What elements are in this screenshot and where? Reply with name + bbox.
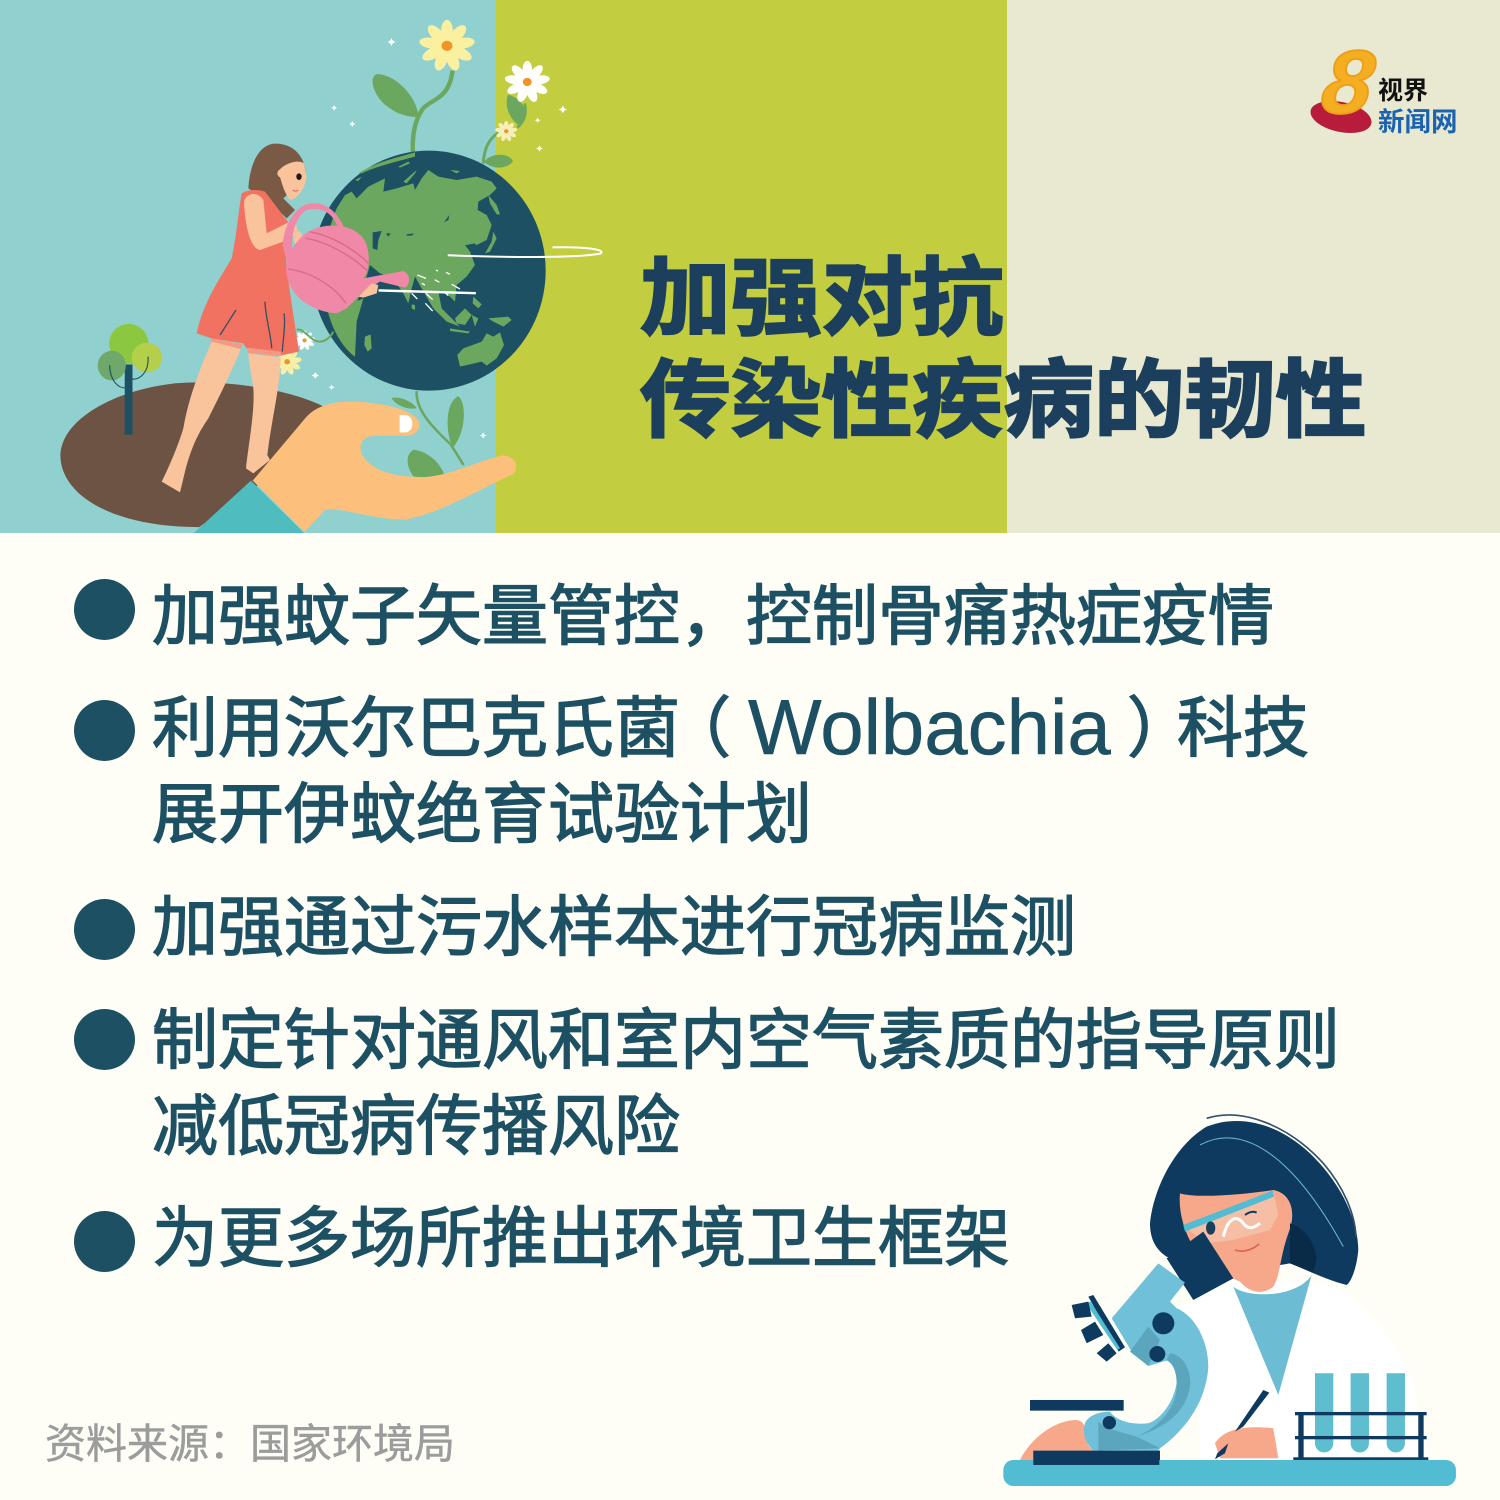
- legs: [162, 342, 281, 492]
- ground island: [60, 382, 327, 527]
- illustration: girl watering the globe: [60, 20, 603, 533]
- flower stem: [297, 330, 333, 342]
- water drops: [412, 270, 460, 311]
- bullet 4: [74, 1009, 135, 1070]
- lab coat: [1180, 1277, 1428, 1460]
- header panel background: [0, 0, 1500, 533]
- logo text: 新闻网: [1378, 107, 1458, 137]
- goggles: [1183, 1191, 1278, 1243]
- microscope: [1020, 1263, 1208, 1465]
- shirt: [1233, 1275, 1312, 1395]
- test tubes: [1315, 1373, 1405, 1452]
- text: item 4: 减低冠病传播风险: [152, 1089, 680, 1163]
- text: item 4: 制定针对通风和室内空气素质的指导原则: [152, 1003, 1340, 1077]
- girl: [162, 144, 409, 492]
- text: item 5: 为更多场所推出环境卫生框架: [152, 1201, 1010, 1275]
- thumbnail: [400, 415, 412, 432]
- orbit lines: [448, 247, 602, 257]
- title: [640, 252, 1366, 449]
- plants above the globe: [373, 71, 526, 168]
- arm: [244, 194, 297, 250]
- tree: [98, 324, 162, 435]
- right hand and pen: [1215, 1390, 1278, 1459]
- logo: channel 8: 8: [1316, 32, 1381, 133]
- smile: [1235, 1244, 1259, 1251]
- bullet 3: [74, 899, 135, 960]
- title: 加强对抗: [640, 252, 1003, 347]
- table: [1003, 1460, 1456, 1486]
- hair: [1150, 1115, 1358, 1285]
- logo text: 视界: [1378, 77, 1428, 105]
- watering can: [283, 203, 409, 313]
- bullet 2: [74, 700, 135, 761]
- sparkles: [311, 38, 567, 439]
- text: item 3: 加强通过污水样本进行冠病监测: [152, 890, 1076, 964]
- text: item 2: 展开伊蚊绝育试验计划: [152, 777, 812, 851]
- dress: [197, 190, 299, 356]
- logo text: [1378, 77, 1458, 137]
- text: item 2: 利用沃尔巴克氏菌: [152, 691, 680, 765]
- bullet 1: [74, 579, 135, 640]
- text: item 2: （: [665, 691, 731, 765]
- plant below globe: [392, 391, 464, 479]
- flowers: [272, 20, 550, 376]
- test tube rack: [1293, 1412, 1428, 1460]
- text: item 2: [152, 683, 1309, 851]
- microscope base over table: [1033, 1451, 1159, 1465]
- text: item 2: 科技: [1177, 691, 1309, 765]
- cuff: [194, 481, 305, 533]
- face: [277, 162, 307, 200]
- text: item 4: [152, 1003, 1340, 1163]
- hair: [248, 144, 306, 218]
- globe: [312, 151, 546, 391]
- text: item 2: Wolbachia: [748, 683, 1111, 771]
- text: item 2: ）: [1127, 691, 1193, 765]
- text: item 1: 加强蚊子矢量管控，控制骨痛热症疫情: [152, 579, 1274, 653]
- title: 传染性疾病的韧性: [640, 354, 1366, 449]
- bullet 5: [74, 1211, 135, 1272]
- hand: [253, 402, 516, 532]
- microscope eyepiece: [1167, 1232, 1233, 1300]
- face: [1180, 1190, 1292, 1292]
- source: 资料来源：国家环境局: [45, 1421, 455, 1467]
